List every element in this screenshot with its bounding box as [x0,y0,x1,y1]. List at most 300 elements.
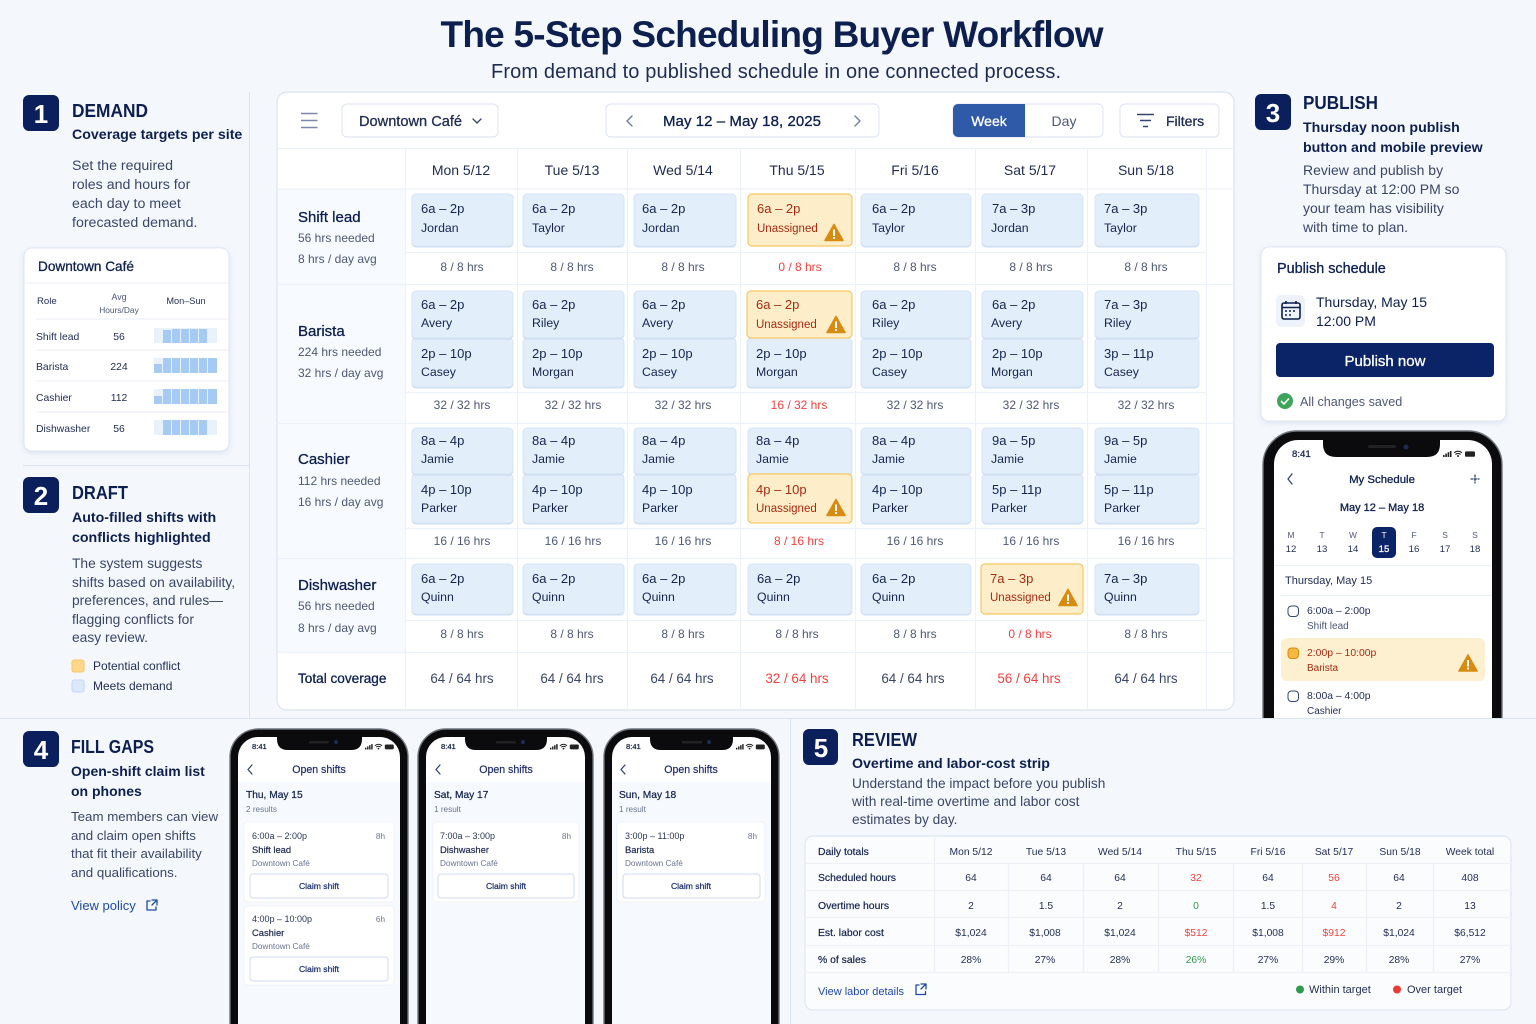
table row: scheduled hours [818,873,1479,884]
row: dishwasher: 6a – 2p [757,571,800,586]
table row: scheduled hours: 32 [1190,873,1202,884]
step 5: review [803,729,1511,1010]
fill gaps description: Team members can view [71,809,218,824]
publish description: Review and publish by [1303,162,1443,178]
shift card: Thu 4p: 4:00p – 10:00p [252,914,312,924]
week strip: S [1442,530,1448,540]
demand row: dishwasher [36,420,217,435]
conflict card: Thu cashier: Unassigned [756,503,817,515]
row: dishwasher: Quinn [872,590,905,604]
saved status: All changes saved [1300,395,1402,409]
table row: overtime hours: 2 [968,901,974,912]
row: barista: Barista [298,323,345,340]
table row: percent of sales: 27% [1035,955,1055,966]
publish card: Publish schedule [1277,261,1386,277]
table row: percent of sales: % of sales [818,955,866,966]
shift card: Sat 7a: 8h [562,832,571,841]
table row: scheduled hours: 408 [1461,873,1479,884]
row: shift lead [298,194,1199,274]
filters button [1120,104,1219,137]
draft description: shifts based on availability, [72,575,235,590]
table row: percent of sales: 27% [1460,955,1480,966]
row: cashier: 16 hrs / day avg [298,495,383,509]
step 1: demand [23,95,242,451]
week strip: 17 [1440,544,1450,555]
legend: over target: Over target [1407,984,1462,996]
draft description: easy review. [72,630,148,645]
shift card: Sun 3p: 3:00p – 11:00p [625,831,684,841]
shift card: Thu 4p: Downtown Café [252,942,310,951]
row: barista: 6a – 2p [992,297,1035,312]
publish card [1261,247,1506,421]
demand card: Downtown Café [38,259,134,274]
row: barista: Morgan [532,365,574,379]
row: barista: 32 hrs / day avg [298,366,383,380]
row: cashier: Parker [642,501,678,515]
row: shift lead: Jordan [642,221,680,235]
shift item: shift lead: Shift lead [1307,621,1349,632]
phone: my schedule: May 12 – May 18 [1340,502,1424,514]
demand row: shift lead: Shift lead [36,332,80,343]
table header [818,847,1494,858]
table row: overtime hours: 2 [1396,901,1402,912]
row: cashier: 8a – 4p [421,433,464,448]
row: shift lead: 6a – 2p [872,201,915,216]
conflict card: Thu shift lead: 6a – 2p [757,201,800,216]
row: barista: Morgan [756,365,798,379]
row: dishwasher: 6a – 2p [532,571,575,586]
week/day toggle: Week [971,113,1008,129]
row: shift lead: 0 / 8 hrs [778,260,822,274]
draft description: preferences, and rules— [72,593,223,608]
row: barista: 16 / 32 hrs [771,398,827,412]
demand card: Avg [112,292,127,302]
draft description: flagging conflicts for [72,612,194,627]
conflict card: Thu shift lead [748,194,852,246]
demand card: Role [37,296,57,307]
conflict card: Sat dishwasher [981,564,1083,614]
site dropdown: Downtown Café [359,114,462,130]
row: cashier: 9a – 5p [992,433,1035,448]
row: dishwasher: 8 hrs / day avg [298,621,377,635]
link: view labor details [818,984,926,998]
panel: weekly schedule [277,92,1234,710]
draft description: The system suggests [72,556,202,571]
row: cashier: 4p – 10p [872,482,923,497]
shift item: shift lead: 6:00a – 2:00p [1307,606,1371,617]
row: shift lead: 7a – 3p [1104,201,1147,216]
phone: open shifts Sat: Open shifts [479,764,533,776]
row: cashier: Jamie [421,452,454,466]
row: total coverage: 56 / 64 hrs [997,671,1061,686]
row: cashier: 8a – 4p [756,433,799,448]
row: cashier: 16 / 16 hrs [1118,534,1174,548]
demand row: cashier [36,389,217,404]
phone: open shifts Sat: 1 result [434,805,462,814]
row: barista: Riley [532,316,560,330]
row: barista: Riley [1104,316,1132,330]
table row: overtime hours: 1.5 [1261,901,1275,912]
row: barista: Morgan [991,365,1033,379]
subheading: open-shift claim list: on phones [71,783,142,799]
row: cashier: 8 / 16 hrs [774,534,824,548]
conflict card: Thu cashier: 4p – 10p [756,482,807,497]
subheading: auto-filled: conflicts highlighted [72,530,211,546]
row: cashier: 16 / 16 hrs [887,534,943,548]
row: dishwasher: 56 hrs needed [298,599,375,613]
table row: labor cost: Est. labor cost [818,928,884,939]
table header: Week total [1446,847,1494,858]
phone: open shifts Thu: Thu, May 15 [246,790,303,801]
demand description: forecasted demand. [72,215,197,231]
phone: open shifts Sat: Sat, May 17 [434,790,489,801]
shift item: barista conflict: Barista [1307,663,1339,674]
row: shift lead: Shift lead [298,209,361,226]
conflict card: Thu barista: 6a – 2p [756,297,799,312]
phone: open shifts Sun: 1 result [619,805,647,814]
conflict card: Thu shift lead: Unassigned [757,223,818,235]
row: dishwasher: 6a – 2p [421,571,464,586]
phone: open shifts Thu [230,729,408,1024]
table row: scheduled hours: 64 [1393,873,1405,884]
row: dishwasher: 0 / 8 hrs [1008,627,1052,641]
row: dishwasher: 8 / 8 hrs [440,627,484,641]
row: dishwasher: Dishwasher [298,577,376,594]
badge 2 [23,477,59,513]
shift card: Thu 6a: 6:00a – 2:00p [252,831,307,841]
row: cashier: 4p – 10p [532,482,583,497]
badge 5: 5 [814,733,828,763]
row: barista: Casey [1104,365,1140,379]
row: total coverage: Total coverage [298,671,386,686]
icon: menu [301,114,318,128]
row: cashier: Parker [421,501,457,515]
shift card: Thu 6a: Downtown Café [252,859,310,868]
day column headers: Thu 5/15 [769,162,825,178]
site dropdown [342,104,498,137]
table row: overtime hours: 4 [1331,901,1337,912]
table row: labor cost: $1,024 [955,928,987,939]
demand card: Hours/Day [99,305,140,315]
table header: Fri 5/16 [1251,847,1286,858]
demand row: cashier: Cashier [36,393,72,404]
table row: labor cost: $6,512 [1454,928,1486,939]
row: barista: Avery [991,316,1023,330]
subheading: thursday noon: button and mobile preview [1303,140,1484,156]
shift card: Sun 3p: Barista [625,844,655,855]
day column headers: Tue 5/13 [545,162,600,178]
table row: scheduled hours: 64 [965,873,977,884]
badge 3 [1255,94,1291,130]
week strip: 16 [1409,544,1419,555]
heading: fill gaps: FILL GAPS [71,737,154,757]
table header: Wed 5/14 [1098,847,1142,858]
week/day toggle: Day [1052,113,1076,129]
row: shift lead: Taylor [532,221,565,235]
row: cashier: 16 / 16 hrs [1003,534,1059,548]
conflict card: Sat dishwasher: 7a – 3p [990,571,1033,586]
labor cost table [805,836,1511,1010]
table row: scheduled hours: Scheduled hours [818,873,896,884]
row: shift lead: 6a – 2p [532,201,575,216]
table row: labor cost: $1,024 [1383,928,1415,939]
row: shift lead: 6a – 2p [642,201,685,216]
phone: my schedule: Thursday, May 15 [1285,575,1372,587]
row: cashier: Jamie [1104,452,1137,466]
subheading: coverage targets: Coverage targets per site [72,127,242,143]
phone: open shifts Sat [418,729,593,1024]
conflict card: Sat dishwasher: Unassigned [990,592,1051,604]
demand row: shift lead: 56 [113,332,125,343]
phone: open shifts Sun [604,729,779,1024]
table header: Thu 5/15 [1176,847,1217,858]
fill gaps description: and claim open shifts [71,828,196,843]
heading: review: REVIEW [852,730,917,750]
shift card: Sun 3p: Claim shift [671,881,712,891]
row: barista: 224 hrs needed [298,345,381,359]
row: shift lead: 8 / 8 hrs [893,260,937,274]
row: barista: 6a – 2p [532,297,575,312]
phone: open shifts Sun: 8:41 [626,742,641,751]
demand row: shift lead [36,328,217,343]
table row: percent of sales: 26% [1186,955,1206,966]
shift card: Sat 7a: 7:00a – 3:00p [440,831,495,841]
table row: labor cost: $1,008 [1252,928,1284,939]
demand row: dishwasher: 56 [113,424,125,435]
row: barista: 2p – 10p [642,346,693,361]
week/day toggle [953,104,1103,137]
phone: open shifts Sun: Open shifts [664,764,718,776]
phone: open shifts Thu: 8:41 [252,742,267,751]
row: dishwasher: 6a – 2p [642,571,685,586]
week strip: T [1319,530,1325,540]
shift item: barista conflict [1281,638,1485,681]
day column headers: Mon 5/12 [432,162,490,178]
row: barista: 6a – 2p [421,297,464,312]
review description: with real-time overtime and labor cost [851,794,1080,809]
day column headers [432,162,1174,178]
row: shift lead: 8 / 8 hrs [661,260,705,274]
row: barista: 32 / 32 hrs [655,398,711,412]
table header: Tue 5/13 [1026,847,1066,858]
shift item: cashier: 8:00a – 4:00p [1307,691,1371,702]
week strip: F [1411,530,1417,540]
day column headers: Fri 5/16 [891,162,939,178]
date range selector [606,104,879,137]
row: cashier: Jamie [532,452,565,466]
phone: my schedule: 8:41 [1292,449,1311,460]
table row: overtime hours: 0 [1193,901,1199,912]
table header: Daily totals [818,847,869,858]
shift item: barista conflict: 2:00p – 10:00p [1307,648,1377,659]
title: The 5-Step Scheduling Buyer Workflow [440,14,1104,55]
row: cashier: 16 / 16 hrs [655,534,711,548]
step 4: fill gaps [23,729,779,1024]
shift card: Thu 4p [244,906,394,985]
row: barista: Avery [421,316,453,330]
row: barista: 3p – 11p [1104,346,1154,361]
table row: labor cost: $512 [1185,928,1208,939]
shift item: cashier: Cashier [1307,706,1342,717]
week strip: 15 [1379,544,1389,555]
table row: percent of sales: 27% [1258,955,1278,966]
day column headers: Sun 5/18 [1118,162,1174,178]
row: dishwasher: 7a – 3p [1104,571,1147,586]
row: barista: 2p – 10p [421,346,472,361]
week strip [1286,532,1480,552]
row: barista [298,291,1199,412]
publish description: your team has visibility [1303,200,1444,216]
row: barista: Riley [872,316,900,330]
review description: Understand the impact before you publish [852,776,1105,791]
toolbar [301,104,1219,137]
row: cashier: Parker [1104,501,1140,515]
fill gaps description: that fit their availability [71,846,202,861]
subheading: auto-filled: Auto-filled shifts with [72,510,216,526]
row: cashier: 9a – 5p [1104,433,1147,448]
row: barista: Casey [421,365,457,379]
shift card: Thu 6a: Shift lead [252,844,291,855]
legend: potential conflict: Potential conflict [93,659,181,673]
row: shift lead: 56 hrs needed [298,231,375,245]
row: barista: 32 / 32 hrs [545,398,601,412]
shift card: Thu 4p: 6h [376,915,385,924]
heading: publish: PUBLISH [1303,93,1378,113]
row: barista: 32 / 32 hrs [1118,398,1174,412]
table row: labor cost: $912 [1323,928,1346,939]
table row: scheduled hours: 64 [1114,873,1126,884]
table row: percent of sales: 28% [1110,955,1130,966]
demand row: barista [36,358,217,373]
row: dishwasher: Quinn [642,590,675,604]
row: barista: Casey [642,365,678,379]
row: cashier: Jamie [872,452,905,466]
phone: my schedule: My Schedule [1349,474,1415,486]
shift card: Sun 3p: 8h [748,832,757,841]
link: view policy: View policy [71,898,136,913]
week strip: 18 [1470,544,1480,555]
row: cashier: 8a – 4p [532,433,575,448]
conflict card: Thu barista [747,291,852,338]
row: shift lead: 8 / 8 hrs [1124,260,1168,274]
row: barista: 2p – 10p [872,346,923,361]
table row: overtime hours: Overtime hours [818,901,889,912]
row: shift lead: 8 / 8 hrs [1009,260,1053,274]
week strip: 13 [1317,544,1327,555]
legend: meets demand: Meets demand [93,679,172,693]
conflict card: Thu cashier [748,474,852,523]
row: shift lead: Taylor [872,221,905,235]
row: dishwasher: 8 / 8 hrs [893,627,937,641]
week strip: 14 [1348,544,1359,555]
table row: overtime hours: 13 [1464,901,1476,912]
row: cashier: 8a – 4p [642,433,685,448]
day column headers: Sat 5/17 [1004,162,1056,178]
row: barista: Casey [872,365,908,379]
demand description: Set the required [72,158,173,174]
week strip: W [1349,530,1357,540]
table header: Sat 5/17 [1315,847,1353,858]
row: total coverage: 64 / 64 hrs [1114,671,1178,686]
row: cashier: 4p – 10p [421,482,472,497]
publish card: Thursday, May 15 [1316,294,1427,310]
shift card: Thu 6a: Claim shift [299,881,340,891]
row: cashier: Parker [991,501,1027,515]
step 3: publish [1255,93,1506,771]
row: dishwasher [298,564,1199,641]
demand row: cashier: 112 [111,393,127,404]
link: view labor details: View labor details [818,986,905,998]
table header: Sun 5/18 [1379,847,1421,858]
row: shift lead: 8 / 8 hrs [440,260,484,274]
row: shift lead: 7a – 3p [992,201,1035,216]
demand card: Mon–Sun [166,296,206,306]
demand card [24,248,229,451]
demand row: dishwasher: Dishwasher [36,424,91,435]
conflict card: Thu barista: Unassigned [756,319,817,331]
row: cashier: 5p – 11p [1104,482,1154,497]
review description: estimates by day. [852,812,958,827]
demand description: roles and hours for [72,177,191,193]
table row: percent of sales [818,955,1480,966]
table row: overtime hours [818,901,1476,912]
button: publish now: Publish now [1345,353,1426,370]
shift card: Sat 7a [433,822,579,902]
heading: demand: DEMAND [72,101,148,121]
subheading: thursday noon: Thursday noon publish [1303,120,1460,136]
row: barista: 2p – 10p [532,346,583,361]
row: cashier: 5p – 11p [992,482,1042,497]
row: barista: Avery [642,316,674,330]
button: publish now [1276,343,1494,377]
table row: labor cost [818,928,1486,939]
publish description: with time to plan. [1302,219,1408,235]
row: total coverage: 64 / 64 hrs [430,671,494,686]
publish card: 12:00 PM [1316,313,1376,329]
row: barista: 2p – 10p [992,346,1043,361]
row: cashier: 112 hrs needed [298,474,381,488]
row: shift lead: Jordan [991,221,1029,235]
subtitle: From demand to published schedule in one connected process. [491,61,1061,83]
icon: calendar [1276,295,1305,327]
row: cashier: Jamie [756,452,789,466]
table row: percent of sales: 28% [961,955,981,966]
badge 1 [23,95,59,131]
row: cashier: 8a – 4p [872,433,915,448]
row: shift lead: 8 / 8 hrs [550,260,594,274]
table row: percent of sales: 28% [1389,955,1409,966]
shift card: Sun 3p [617,822,765,902]
table row: scheduled hours: 56 [1328,873,1340,884]
day column headers: Wed 5/14 [653,162,713,178]
filters button: Filters [1166,113,1204,129]
phone: open shifts Thu: Open shifts [292,764,346,776]
row: cashier: 4p – 10p [642,482,693,497]
row: dishwasher: Quinn [1104,590,1137,604]
phone: my schedule [1262,430,1503,718]
shift item: shift lead [1288,606,1371,632]
badge 2: 2 [34,481,48,511]
row: barista: 2p – 10p [756,346,807,361]
row: dishwasher: 8 / 8 hrs [661,627,705,641]
date range selector: May 12 – May 18, 2025 [663,113,821,130]
row: dishwasher: 6a – 2p [872,571,915,586]
table row: scheduled hours: 64 [1040,873,1052,884]
row: barista: 32 / 32 hrs [1003,398,1059,412]
shift card: Thu 4p: Claim shift [299,964,340,974]
row: barista: 32 / 32 hrs [887,398,943,412]
row: shift lead: Jordan [421,221,459,235]
